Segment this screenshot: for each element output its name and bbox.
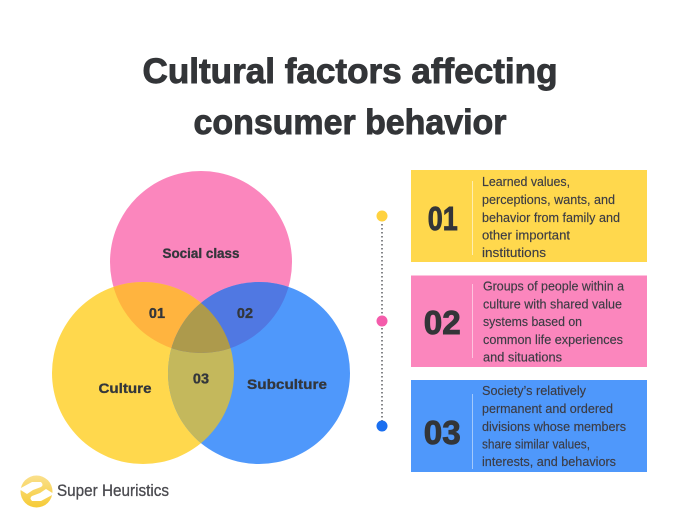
number 01: 01 bbox=[428, 201, 458, 238]
number 02: 02 bbox=[424, 305, 461, 342]
circle: subculture bbox=[168, 282, 350, 464]
title bbox=[142, 52, 558, 142]
panel: 01 bbox=[411, 170, 647, 262]
description 03: Society’s relatively bbox=[482, 384, 587, 398]
label: 02: 02 bbox=[237, 306, 253, 322]
label: subculture: Subculture bbox=[247, 376, 327, 392]
timeline bbox=[376, 210, 388, 432]
circle: social class bbox=[110, 171, 292, 353]
venn diagram bbox=[52, 171, 350, 464]
description 02 bbox=[483, 280, 624, 365]
description 03: permanent and ordered bbox=[482, 402, 613, 416]
number 03: 03 bbox=[424, 415, 461, 452]
dot: yellow bbox=[376, 210, 388, 222]
description 02: culture with shared value bbox=[483, 298, 622, 312]
description 02: and situations bbox=[483, 351, 562, 365]
description 03: share similar values, bbox=[482, 438, 590, 452]
wordmark: Super Heuristics bbox=[57, 482, 169, 500]
label: culture: Culture bbox=[98, 380, 152, 396]
label: social class: Social class bbox=[162, 246, 240, 261]
label: 03: 03 bbox=[193, 372, 209, 388]
description 01: perceptions, wants, and bbox=[482, 193, 615, 207]
label: 01: 01 bbox=[149, 306, 165, 322]
description 02: Groups of people within a bbox=[483, 280, 624, 294]
title: Cultural factors affecting bbox=[142, 52, 558, 91]
overlap: culture and subculture bbox=[168, 348, 234, 443]
overlap: all three bbox=[172, 303, 230, 353]
title: consumer behavior bbox=[194, 103, 507, 142]
panel: 02 bbox=[411, 276, 647, 367]
icon: logo mark bbox=[19, 476, 54, 508]
logo: Super Heuristics bbox=[19, 476, 169, 508]
description 02: common life experiences bbox=[483, 333, 623, 347]
description 01 bbox=[482, 175, 620, 260]
description 02: systems based on bbox=[483, 315, 582, 329]
dot: blue bbox=[376, 420, 388, 432]
description 01: Learned values, bbox=[482, 175, 570, 189]
circle: culture bbox=[52, 282, 234, 464]
description 03: interests, and behaviors bbox=[482, 455, 616, 469]
dot: pink bbox=[376, 316, 388, 326]
description 03: divisions whose members bbox=[482, 420, 626, 434]
overlap: social class and culture bbox=[114, 282, 229, 353]
description 03 bbox=[482, 384, 626, 469]
description 01: institutions bbox=[482, 246, 546, 260]
description 01: other important bbox=[482, 228, 571, 242]
panel: 03 bbox=[411, 380, 647, 472]
description 01: behavior from family and bbox=[482, 211, 620, 225]
overlap: social class and subculture bbox=[172, 282, 288, 353]
